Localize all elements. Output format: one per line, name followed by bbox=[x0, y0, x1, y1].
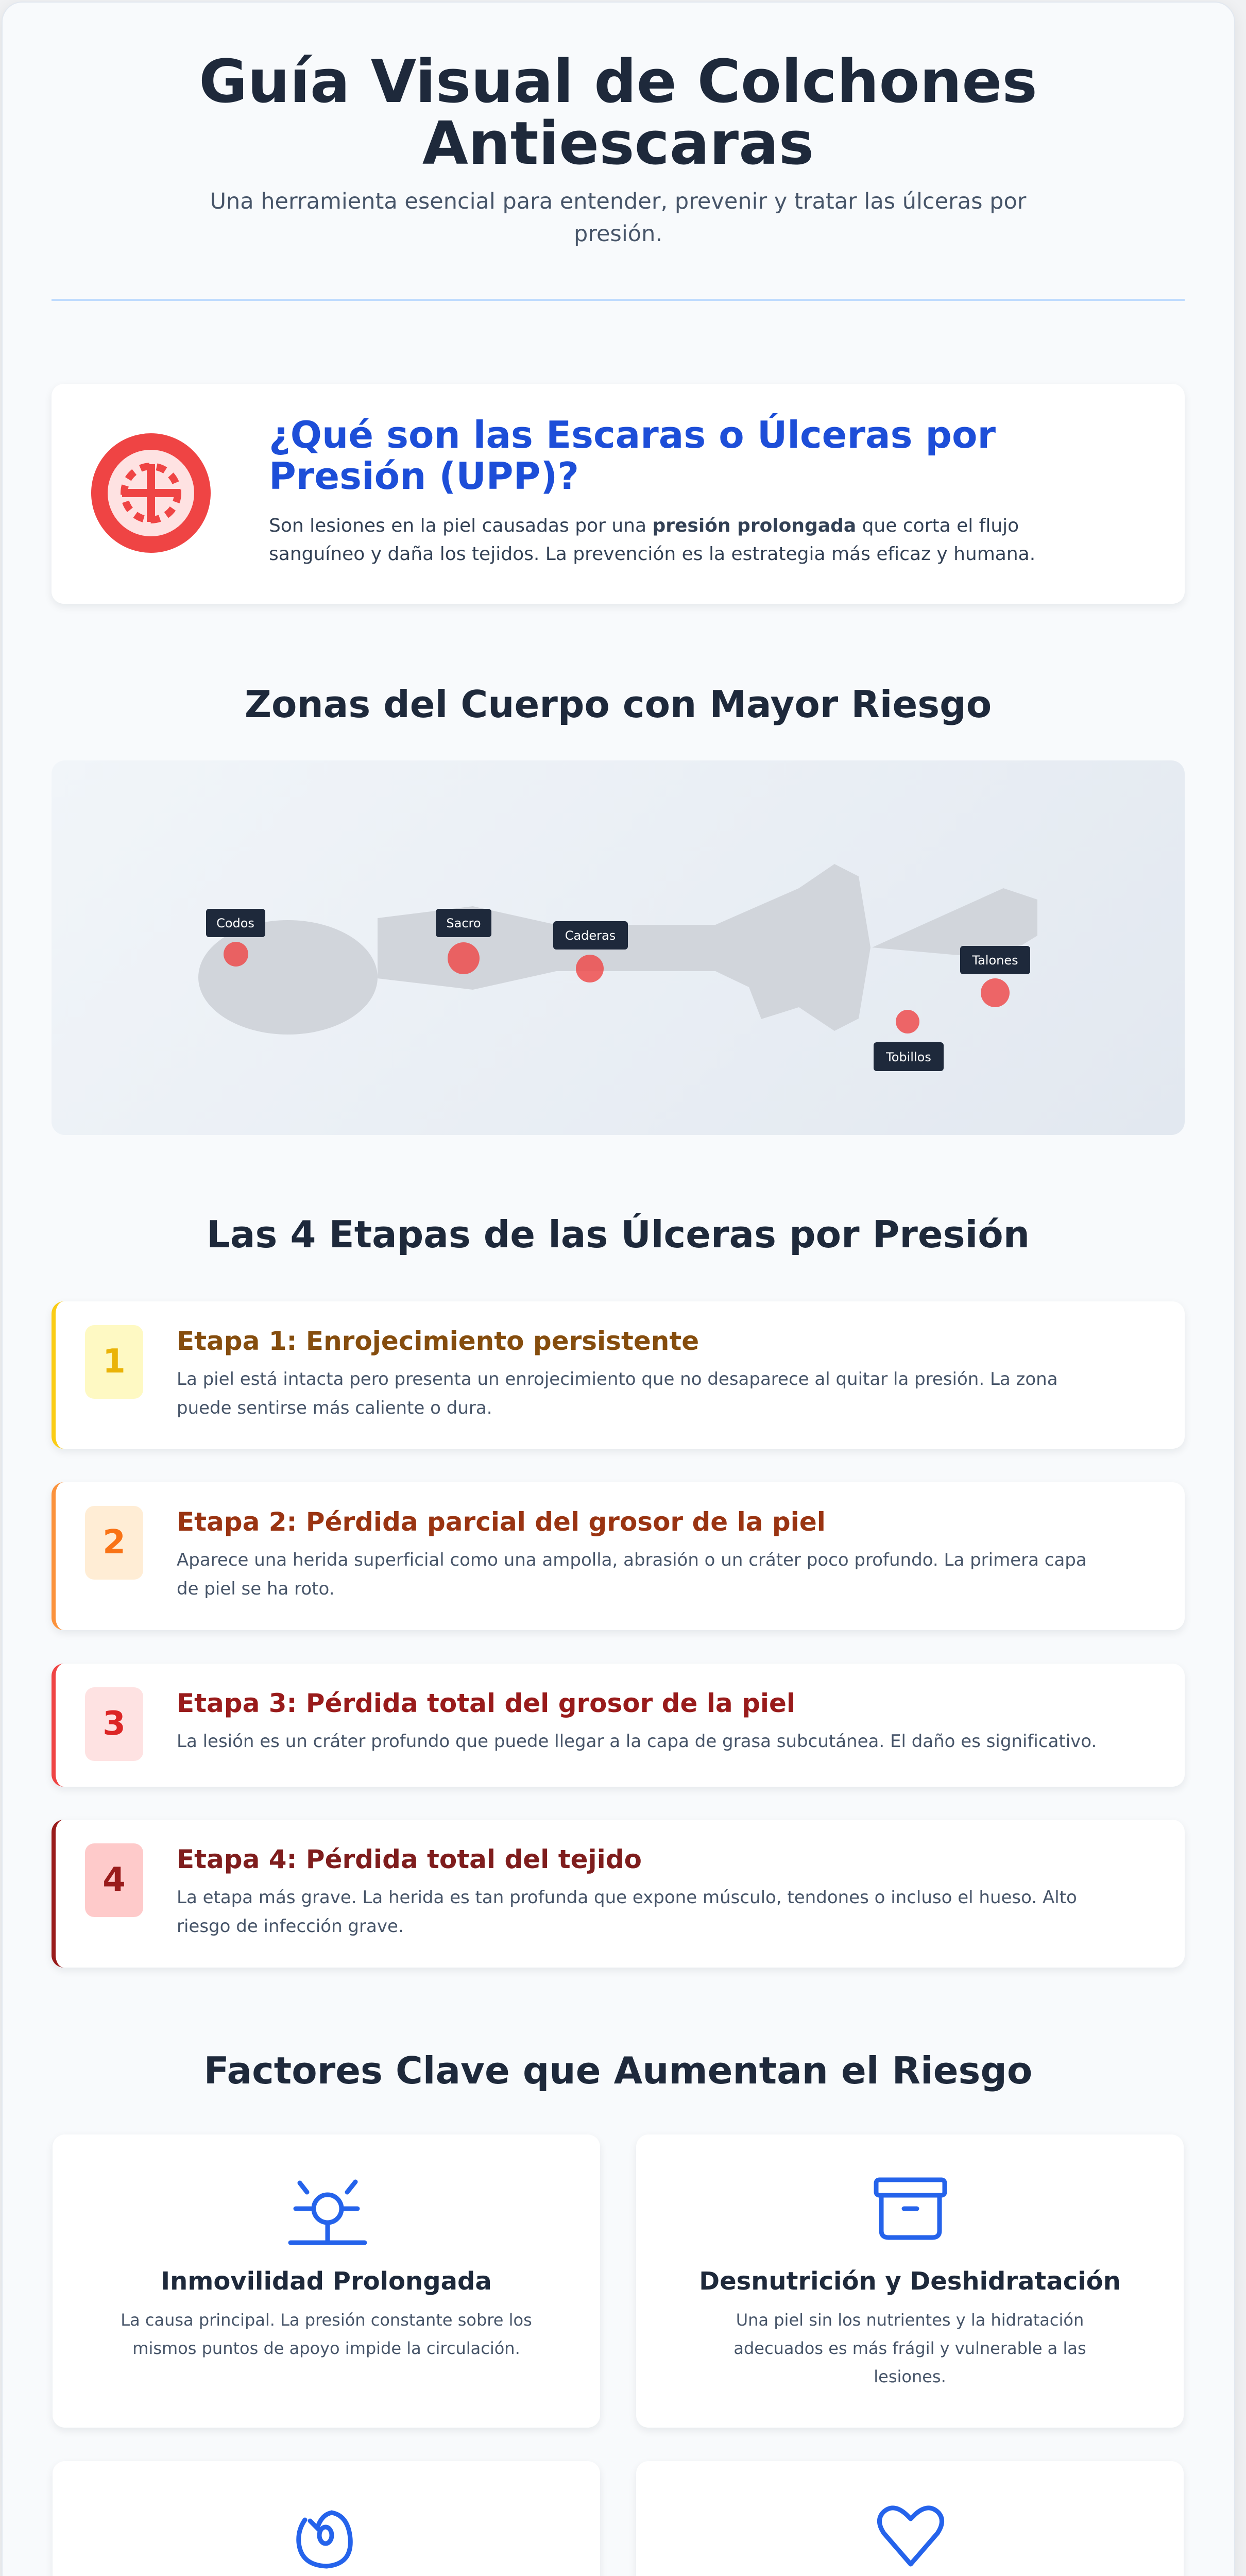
icon: moisture drop bbox=[296, 2510, 353, 2569]
heading bbox=[269, 413, 996, 498]
panel: factor immobility: Inmovilidad Prolongada bbox=[161, 2267, 492, 2296]
chart: body silhouette with risk points: Tobillos bbox=[885, 1050, 931, 1064]
panel: stage 3 bbox=[52, 1664, 1185, 1787]
icon: person lying bbox=[288, 2179, 367, 2245]
panel: body map bbox=[52, 760, 1185, 1135]
heading: Presión (UPP)? bbox=[269, 454, 579, 498]
panel: factor humidity bbox=[53, 2461, 600, 2576]
chart: body silhouette with risk points bbox=[198, 864, 1037, 1071]
chart: body silhouette with risk points: Caderas bbox=[565, 928, 616, 943]
heading: risk zones: Zonas del Cuerpo con Mayor Riesgo bbox=[245, 683, 992, 726]
icon: heart bbox=[877, 2505, 945, 2567]
panel: stage 2: de piel se ha roto. bbox=[177, 1579, 335, 1599]
icon: box bbox=[874, 2177, 947, 2240]
panel: factor malnutrition bbox=[636, 2134, 1184, 2428]
panel: factor malnutrition: Una piel sin los nutrientes y la hidratación bbox=[736, 2310, 1084, 2330]
panel: factor immobility: mismos puntos de apoyo impide la circulación. bbox=[132, 2338, 520, 2358]
panel: what are pressure ulcers bbox=[52, 384, 1185, 604]
title bbox=[199, 47, 1037, 178]
panel: factor immobility: La causa principal. La presión constante sobre los bbox=[121, 2310, 532, 2330]
title: Antiescaras bbox=[422, 109, 814, 178]
text block: Son lesiones en la piel causadas por una presión prolongada que corta el flujo bbox=[269, 515, 1019, 536]
panel: stage 4: La etapa más grave. La herida es tan profunda que expone músculo, tendones o incluso el hueso. Alto bbox=[177, 1887, 1077, 1908]
chart: body silhouette with risk points: Talones bbox=[971, 953, 1018, 968]
heading: ¿Qué son las Escaras o Úlceras por bbox=[269, 413, 996, 456]
panel: stage 2 bbox=[52, 1482, 1185, 1630]
panel: stage 4: Etapa 4: Pérdida total del tejido bbox=[177, 1844, 642, 1874]
chart: body silhouette with risk points: Codos bbox=[216, 916, 254, 930]
panel: stage 1: Etapa 1: Enrojecimiento persistente bbox=[177, 1326, 699, 1356]
panel: stage 1: puede sentirse más caliente o dura. bbox=[177, 1398, 492, 1418]
panel: factor malnutrition: lesiones. bbox=[874, 2367, 946, 2386]
panel: stage 3: 3 bbox=[103, 1705, 126, 1743]
icon: red cross circle bbox=[91, 433, 211, 553]
panel: factor immobility bbox=[53, 2134, 600, 2428]
panel: factor medical conditions bbox=[636, 2461, 1184, 2576]
subtitle: presión. bbox=[574, 221, 662, 247]
title: Guía Visual de Colchones bbox=[199, 47, 1037, 116]
heading: risk factors: Factores Clave que Aumentan el Riesgo bbox=[204, 2049, 1032, 2092]
panel: stage 1: 1 bbox=[103, 1343, 126, 1381]
panel: stage 4: riesgo de infección grave. bbox=[177, 1916, 404, 1937]
subtitle: Una herramienta esencial para entender, prevenir y tratar las úlceras por bbox=[210, 189, 1026, 214]
panel: stage 2: 2 bbox=[103, 1523, 126, 1562]
chart: body silhouette with risk points: Sacro bbox=[446, 916, 481, 930]
text block: sanguíneo y daña los tejidos. La prevención es la estrategia más eficaz y humana. bbox=[269, 544, 1035, 565]
panel: stage 4 bbox=[52, 1820, 1185, 1968]
panel: factor malnutrition: Desnutrición y Deshidratación bbox=[699, 2267, 1121, 2296]
panel: stage 1: La piel está intacta pero presenta un enrojecimiento que no desaparece al quitar la presión. La zona bbox=[177, 1369, 1058, 1389]
panel: stage 3: La lesión es un cráter profundo que puede llegar a la capa de grasa subcutánea. El daño es significativo. bbox=[177, 1731, 1097, 1752]
panel: stage 4: 4 bbox=[103, 1861, 126, 1899]
panel: factor malnutrition: adecuados es más frágil y vulnerable a las bbox=[733, 2338, 1086, 2358]
panel: stage 3: Etapa 3: Pérdida total del grosor de la piel bbox=[177, 1688, 795, 1718]
panel: stage 1 bbox=[52, 1301, 1185, 1449]
panel: stage 2: Aparece una herida superficial como una ampolla, abrasión o un cráter poco profundo. La primera capa bbox=[177, 1550, 1087, 1570]
panel: stage 2: Etapa 2: Pérdida parcial del grosor de la piel bbox=[177, 1507, 826, 1537]
heading: 4 stages: Las 4 Etapas de las Úlceras por Presión bbox=[207, 1213, 1030, 1256]
subtitle bbox=[210, 189, 1026, 247]
text block bbox=[269, 515, 1035, 565]
